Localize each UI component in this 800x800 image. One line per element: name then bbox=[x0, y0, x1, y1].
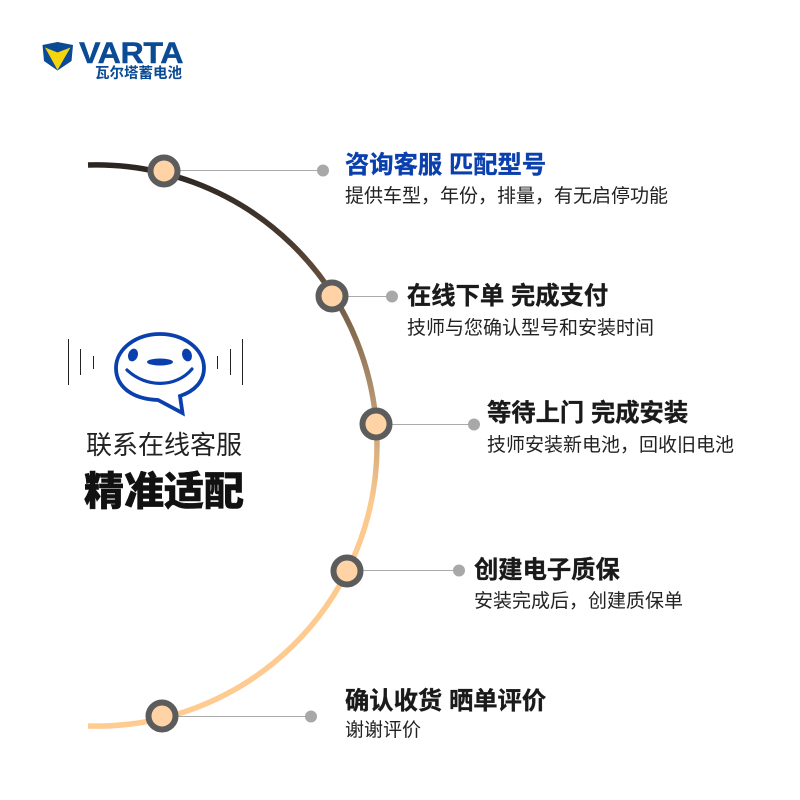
left heading: precise fit: 精准适配 bbox=[84, 470, 244, 514]
step 4 description: 安装完成后，创建质保单 bbox=[474, 591, 683, 612]
step 4 text bbox=[474, 556, 683, 612]
step 3 description: 技师安装新电池，回收旧电池 bbox=[487, 435, 734, 456]
icon: VARTA shield bbox=[42, 42, 73, 70]
node 2 bbox=[318, 282, 398, 310]
logo Chinese tagline: 瓦尔塔蓄电池 bbox=[95, 66, 182, 82]
step 2 heading: 在线下单 完成支付 bbox=[407, 283, 608, 310]
node 3 bbox=[362, 410, 480, 438]
logo wordmark: VARTA bbox=[79, 37, 183, 70]
node 5 bbox=[148, 702, 317, 730]
step 1 text bbox=[345, 152, 668, 207]
step 5 text bbox=[345, 688, 546, 741]
step 5 description: 谢谢评价 bbox=[345, 720, 421, 741]
left heading: contact support: 联系在线客服 bbox=[86, 430, 242, 460]
step 3 text bbox=[487, 400, 734, 456]
step 1 description: 提供车型，年份，排量，有无启停功能 bbox=[345, 186, 668, 207]
step 4 heading: 创建电子质保 bbox=[474, 557, 620, 584]
step 3 heading: 等待上门 完成安装 bbox=[487, 400, 688, 427]
node 1 bbox=[150, 158, 329, 184]
step 2 text bbox=[407, 282, 654, 339]
logo: VARTA bbox=[42, 37, 183, 82]
step 2 description: 技师与您确认型号和安装时间 bbox=[407, 318, 654, 339]
node 4 bbox=[334, 558, 465, 584]
step 1 heading: 咨询客服 匹配型号 bbox=[345, 152, 546, 179]
step 5 heading: 确认收货 晒单评价 bbox=[345, 688, 546, 715]
